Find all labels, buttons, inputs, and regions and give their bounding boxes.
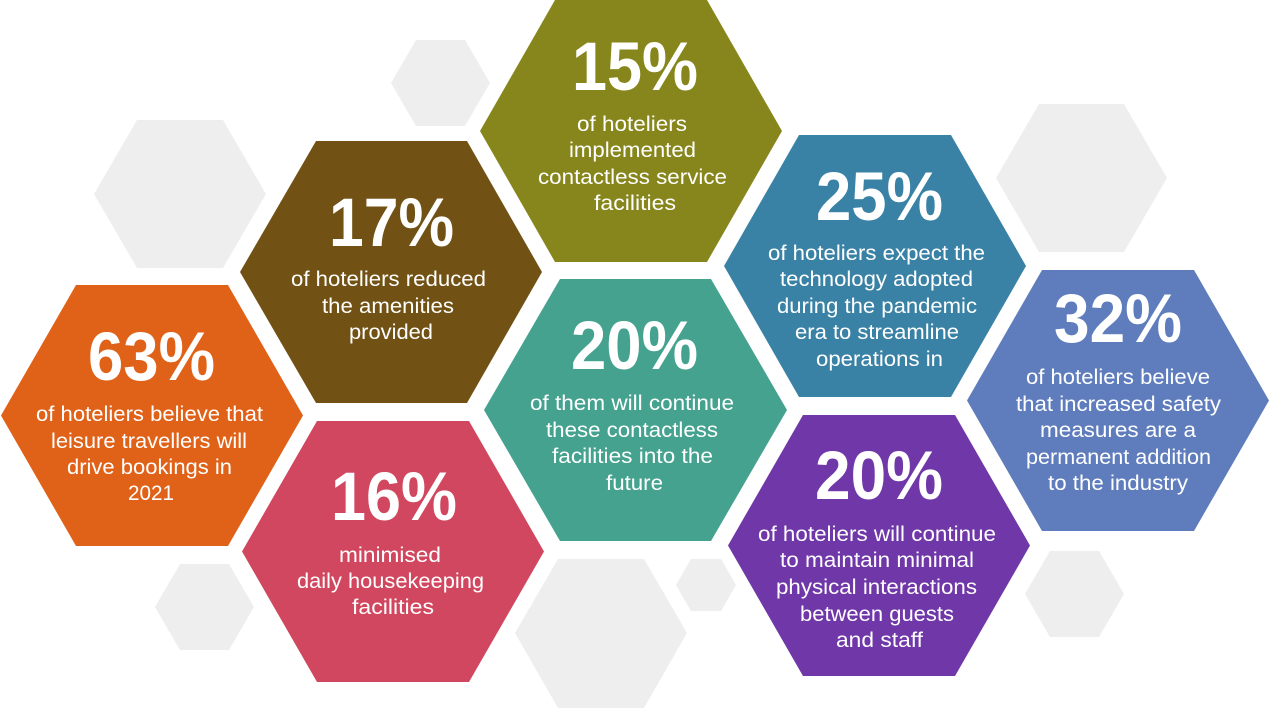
text: 25% description: technology adopted xyxy=(780,267,973,291)
hexagon: red xyxy=(242,421,544,682)
grey hexagon small bottom centre xyxy=(676,559,736,611)
text: 20% interactions description: between guests xyxy=(800,602,954,626)
panel: 63% leisure travellers xyxy=(1,285,303,546)
text: 15% description: implemented xyxy=(569,138,696,162)
stat: 15%: 15% xyxy=(572,28,698,105)
text: 63% description: leisure travellers will xyxy=(51,429,247,453)
text: 20% contactless description xyxy=(530,391,734,495)
text: 17% description: the amenities xyxy=(322,294,454,318)
text: 16% description: daily housekeeping xyxy=(297,569,484,593)
hexagon: purple xyxy=(728,415,1030,676)
stat: 16%: 16% xyxy=(331,458,457,535)
grey hexagon upper left xyxy=(94,120,266,268)
text: 32% description: of hoteliers believe xyxy=(1026,365,1210,389)
text: 20% contactless description: future xyxy=(606,471,663,495)
hexagon: slate blue xyxy=(967,270,1269,531)
text: 16% description: minimised xyxy=(339,543,441,567)
text: 63% description: of hoteliers believe that xyxy=(36,402,263,426)
text: 63% description: drive bookings in xyxy=(67,455,232,479)
text: 25% description: of hoteliers expect the xyxy=(768,241,985,265)
decorative grey hexagons xyxy=(94,40,1167,708)
panel: 20% continue contactless xyxy=(484,279,787,541)
hexagon: orange xyxy=(1,285,303,546)
text: 63% description: 2021 xyxy=(128,481,174,505)
text: 20% interactions description: physical interactions xyxy=(776,575,977,599)
panel: 17% reduced amenities xyxy=(240,141,542,403)
text: 15% description: of hoteliers xyxy=(577,112,687,136)
text: 20% interactions description: and staff xyxy=(836,628,923,652)
hexagon: blue xyxy=(724,135,1026,397)
text: 15% description: contactless service xyxy=(538,165,727,189)
stat: 63%: 63% xyxy=(88,318,215,395)
text: 32% description xyxy=(1016,365,1221,495)
text: 16% description: facilities xyxy=(352,595,434,619)
grey hexagon lower left xyxy=(155,564,254,650)
text: 15% description: facilities xyxy=(594,191,676,215)
text: 15% description xyxy=(538,112,727,215)
text: 32% description: that increased safety xyxy=(1016,392,1221,416)
hexagon: olive xyxy=(480,0,782,262)
grey hexagon upper right xyxy=(996,104,1167,252)
text: 25% description xyxy=(768,241,985,371)
grey hexagon lower right xyxy=(1025,551,1124,637)
stat: 25%: 25% xyxy=(816,158,943,235)
text: 17% description: of hoteliers reduced xyxy=(291,267,486,291)
text: 25% description: era to streamline xyxy=(795,320,959,344)
grey hexagon top centre-left xyxy=(391,40,490,126)
panel: 25% technology adopted xyxy=(724,135,1026,397)
text: 17% description: provided xyxy=(349,320,433,344)
stat: 20% purple: 20% xyxy=(815,437,943,514)
stat: 32%: 32% xyxy=(1054,280,1182,357)
hexagon: brown xyxy=(240,141,542,403)
grey hexagon bottom centre xyxy=(515,559,687,708)
stat: 20% teal: 20% xyxy=(571,307,698,384)
text: 25% description: operations in xyxy=(816,347,943,371)
text: 32% description: permanent addition xyxy=(1026,445,1211,469)
hexagon: teal xyxy=(484,279,787,541)
text: 32% description: to the industry xyxy=(1048,471,1188,495)
text: 20% interactions description: to maintain minimal xyxy=(780,548,974,572)
text: 20% contactless description: of them will continue xyxy=(530,391,734,415)
text: 17% description xyxy=(291,267,486,344)
panel: 15% contactless service xyxy=(480,0,782,262)
text: 20% interactions description: of hoteliers will continue xyxy=(758,522,996,546)
text: 20% contactless description: facilities into the xyxy=(552,444,713,468)
text: 25% description: during the pandemic xyxy=(777,294,977,318)
panel: 32% safety measures xyxy=(967,270,1269,531)
text: 32% description: measures are a xyxy=(1040,418,1196,442)
panel: 16% housekeeping xyxy=(242,421,544,682)
stat: 17%: 17% xyxy=(329,184,454,261)
text: 63% description xyxy=(36,402,263,505)
text: 20% contactless description: these contactless xyxy=(546,418,718,442)
panel: 20% minimal interactions xyxy=(728,415,1030,676)
text: 20% interactions description xyxy=(758,522,996,652)
text: 16% description xyxy=(297,543,484,619)
